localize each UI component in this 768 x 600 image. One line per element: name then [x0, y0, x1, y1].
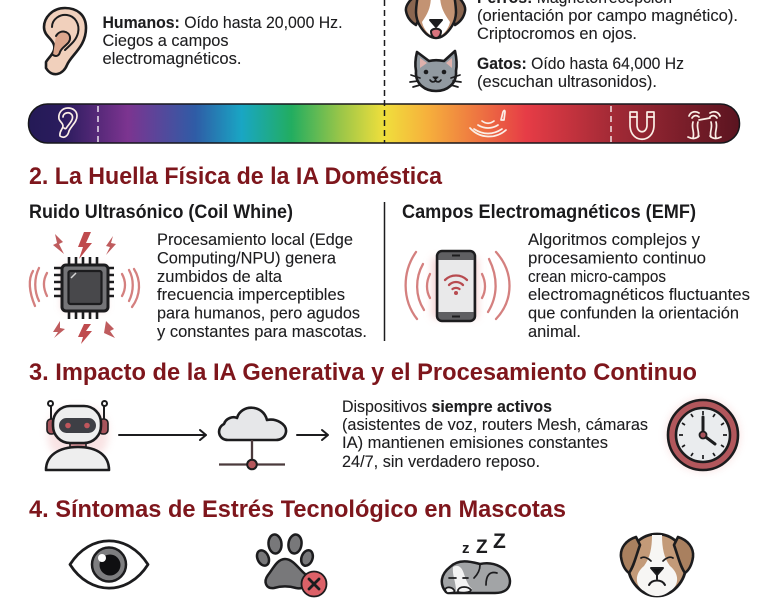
- panel: EMF: [402, 201, 750, 341]
- text: dogs: [477, 0, 738, 43]
- icon: clock: [666, 398, 740, 472]
- text: EMF description: procesamiento continuo: [528, 250, 706, 268]
- panel: sensory comparison: [44, 0, 738, 91]
- text: ultrasonic description: para humanos, pero agudos: [157, 304, 360, 322]
- icon: eye: [70, 541, 148, 588]
- panel: symptoms: [70, 530, 693, 596]
- arrow: cloud to text: [297, 430, 328, 440]
- icon: ultrasound waves on bar: [470, 110, 506, 137]
- panel: continuous processing flow: [46, 398, 740, 472]
- text: always-on description: 24/7, sin verdadero reposo.: [342, 453, 540, 471]
- icon: phone with wifi and fields: [406, 251, 510, 321]
- icon: cat: [410, 51, 461, 91]
- heading: section 3: 3. Impacto de la IA Generativa y el Procesamiento Continuo: [29, 359, 697, 386]
- icon: sleeping pet with zzz: Z: [476, 537, 488, 558]
- icon: robot: [46, 401, 109, 470]
- text: cats: (escuchan ultrasonidos).: [477, 73, 657, 91]
- icon: cloud network: [219, 408, 286, 469]
- text: EMF description: animal.: [528, 323, 581, 341]
- arrow: robot to cloud: [119, 430, 206, 440]
- text: ultrasonic description: Computing/NPU) genera: [157, 250, 336, 268]
- text: humans: Ciegos a campos: [102, 32, 228, 50]
- panel: ultrasonic noise: [29, 201, 367, 344]
- text: ultrasonic description: zumbidos de alta: [157, 268, 282, 286]
- text: always-on description: Dispositivos siempre activos: [342, 398, 552, 416]
- icon: sleeping pet with zzz: [442, 530, 510, 593]
- icon: dog: [406, 0, 465, 38]
- text: always-on description: (asistentes de voz, routers Mesh, cámaras: [342, 416, 648, 434]
- text: dogs: (orientación por campo magnético).: [477, 7, 738, 25]
- spectrum bar: [28, 104, 740, 143]
- center dashed divider: [384, 0, 386, 143]
- text: always-on description: IA) mantienen emisiones constantes: [342, 434, 608, 452]
- subheading: EMF: Campos Electromagnéticos (EMF): [402, 201, 696, 223]
- text: EMF description: electromagnéticos fluctuantes: [528, 286, 750, 304]
- text: humans: Humanos: Oído hasta 20,000 Hz.: [102, 14, 342, 32]
- heading: section 2: 2. La Huella Física de la IA Doméstica: [29, 163, 443, 190]
- icon: human ear: [44, 8, 86, 74]
- icon: chip with sound waves: [30, 232, 139, 344]
- icon: paw with x: [255, 534, 326, 596]
- text: ultrasonic description: frecuencia imperceptibles: [157, 286, 345, 304]
- icon: bird compass on bar: [688, 112, 721, 138]
- text: EMF description: que confunden la orientación: [528, 304, 739, 322]
- icon: magnet on bar: [630, 112, 654, 139]
- text: humans: electromagnéticos.: [102, 50, 242, 68]
- icon: sleeping pet with zzz: Z: [493, 530, 506, 553]
- icon: sad dog: [621, 534, 693, 596]
- text: EMF description: Algoritmos complejos y: [528, 231, 701, 249]
- text: EMF description: crean micro-campos: [528, 268, 666, 286]
- text: cats: Gatos: Oído hasta 64,000 Hz: [477, 55, 684, 73]
- text: ultrasonic description: y constantes para mascotas.: [157, 323, 367, 341]
- text: EMF description: [528, 231, 750, 341]
- subheading: coil whine: Ruido Ultrasónico (Coil Whine): [29, 201, 293, 223]
- text: cats: [477, 55, 684, 91]
- text: humans: [102, 14, 342, 68]
- icon: sleeping pet with zzz: z: [462, 540, 470, 557]
- heading: section 4: 4. Síntomas de Estrés Tecnológico en Mascotas: [29, 496, 566, 523]
- text: ultrasonic description: Procesamiento local (Edge: [157, 231, 353, 249]
- text: ultrasonic description: [157, 231, 367, 341]
- text: dogs: Criptocromos en ojos.: [477, 25, 637, 43]
- text: always-on description: [342, 398, 648, 471]
- icon: ear on bar: [59, 108, 77, 137]
